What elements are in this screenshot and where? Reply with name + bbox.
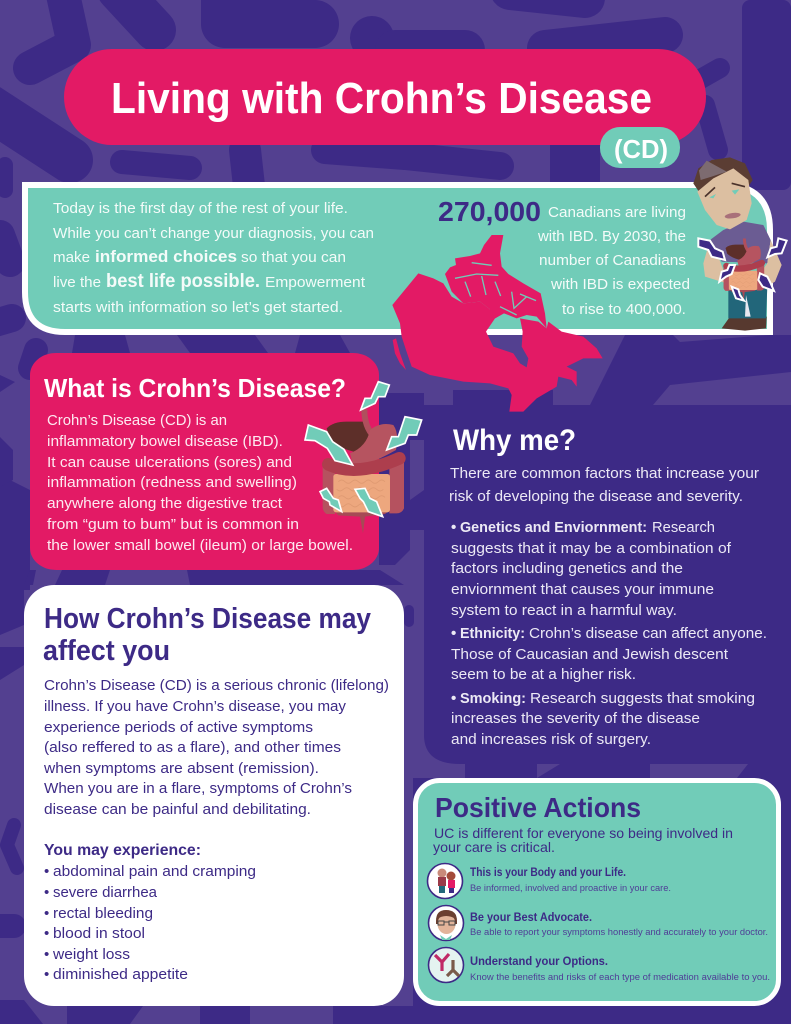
text: ethnicity: Those of Caucasian and Jewish descent [451,646,729,663]
symptoms list [44,842,256,983]
statistic text: with IBD. By 2030, the [537,228,686,245]
action: understand options: Know the benefits and risks of each type of medication available to you. [470,972,770,982]
symptoms list: • [44,863,49,880]
text: ethnicity: Ethnicity: [460,625,525,642]
action: body and life [428,864,671,898]
text: smoking: increases the severity of the disease [451,710,700,727]
symptoms list: diminished appetite [53,966,188,983]
CD badge [600,127,680,168]
text: ethnicity: Crohn’s disease can affect anyone. [529,625,767,642]
action: body and life: Be informed, involved and proactive in your care. [470,883,671,893]
text: how: When you are in a flare, symptoms of Crohn’s [44,780,352,797]
statistic text: with IBD is expected [550,276,690,293]
title banner [64,49,706,145]
symptoms list: rectal bleeding [53,905,153,922]
icon: couple [428,864,462,898]
text: what is: from “gum to bum” but is common in [47,516,299,533]
text: how: disease can be painful and debilitating. [44,801,311,818]
text: smoking: Research suggests that smoking [530,690,755,707]
text: genetics: factors including genetics and the [451,560,683,577]
text: ethnicity: seem to be at a higher risk. [451,666,636,683]
text: what is: It can cause ulcerations (sores) and [47,454,292,471]
text: why me intro: There are common factors that increase your [450,465,759,482]
text: how: when symptoms are absent (remission). [43,760,319,777]
panel: how Crohn's may affect you [24,585,404,1006]
text: what is: Crohn’s Disease (CD) is an [47,412,227,429]
heading: how: affect you [43,635,170,667]
symptoms list: You may experience: [44,842,201,859]
panel: why me [449,424,767,748]
symptoms list: • [44,905,49,922]
icon: antibodies [428,948,464,982]
action: understand options [428,948,770,982]
text: genetics: suggests that it may be a combination of [451,540,732,557]
heading: what is: What is Crohn’s Disease? [44,373,346,403]
symptoms list: • [44,925,49,942]
intro text: so that you can [241,249,346,266]
text: genetics: system to react in a harmful way. [451,602,677,619]
panel: what is Crohn's disease [30,353,422,570]
intro panel [25,185,770,332]
text: what is: the lower small bowel (ileum) or large bowel. [47,537,353,554]
text: how: (also reffered to as a flare), and other times [44,739,341,756]
text: smoking: and increases risk of surgery. [451,731,651,748]
text: smoking [451,690,755,748]
text: smoking: • [451,690,456,707]
text: positive actions intro [433,825,733,855]
map of Canada [392,235,603,412]
action: best advocate: Be able to report your symptoms honestly and accurately to your doctor. [470,927,768,937]
text: how: experience periods of active symptoms [44,719,313,736]
illustration: man in pain [693,157,787,331]
intro text: make [53,249,90,266]
statistic text: 270,000 [438,196,541,227]
text: how: illness. If you have Crohn’s disease, you may [44,698,346,715]
text: positive actions intro: UC is different for everyone so being involved in [434,825,733,841]
symptoms list: severe diarrhea [53,884,158,901]
intro text: starts with information so let’s get started. [53,299,343,316]
heading: positive actions: Positive Actions [435,792,641,823]
action: best advocate [428,906,768,940]
intro text [53,200,374,316]
statistic text: number of Canadians [539,252,686,269]
icon: digestive tract [305,382,422,533]
text: ethnicity: • [451,625,456,642]
symptoms list: • [44,966,49,983]
statistic text: to rise to 400,000. [562,301,686,318]
statistic text: Canadians are living [548,204,686,221]
action: best advocate: Be your Best Advocate. [470,910,592,924]
icon: doctor [428,906,464,940]
symptoms list: abdominal pain and cramping [53,863,256,880]
heading: how: How Crohn’s Disease may [44,603,371,635]
text: what is: inflammation (redness and swelling) [47,474,297,491]
symptoms list: • [44,884,49,901]
symptoms list: blood in stool [53,925,145,942]
text: ethnicity [451,625,767,683]
CD badge: (CD) [614,134,668,164]
text: genetics [451,519,732,619]
title text: Living with Crohn’s Disease [111,74,652,123]
heading: how [43,603,371,667]
text: what is: inflammatory bowel disease (IBD). [47,433,283,450]
intro text: Empowerment [265,274,366,291]
text: positive actions intro: your care is critical. [433,839,555,855]
text: genetics: Research [652,519,715,536]
text: smoking: Smoking: [460,690,526,707]
symptoms list: • [44,946,49,963]
text: what is [47,412,353,554]
text: why me intro: risk of developing the disease and severity. [449,488,743,505]
text: genetics: enviornment that causes your immune [451,581,714,598]
statistic text [438,196,690,318]
intro text: informed choices [95,247,237,266]
action: understand options: Understand your Options. [470,954,608,968]
heading: why me: Why me? [453,424,576,457]
symptoms list: weight loss [52,946,130,963]
intro text: live the [53,274,101,291]
text: genetics: • [451,519,456,536]
text: what is: anywhere along the digestive tract [47,495,283,512]
text: how: Crohn’s Disease (CD) is a serious chronic (lifelong) [44,677,389,694]
intro text: Today is the first day of the rest of your life. [53,200,348,217]
panel: positive actions [416,780,778,1004]
text: genetics: Genetics and Enviornment: [460,519,647,536]
action: body and life: This is your Body and your Life. [470,865,626,879]
intro text: While you can’t change your diagnosis, you can [53,225,374,242]
text: why me intro [449,465,759,505]
intro text: best life possible. [106,271,260,292]
text: how [43,677,389,818]
